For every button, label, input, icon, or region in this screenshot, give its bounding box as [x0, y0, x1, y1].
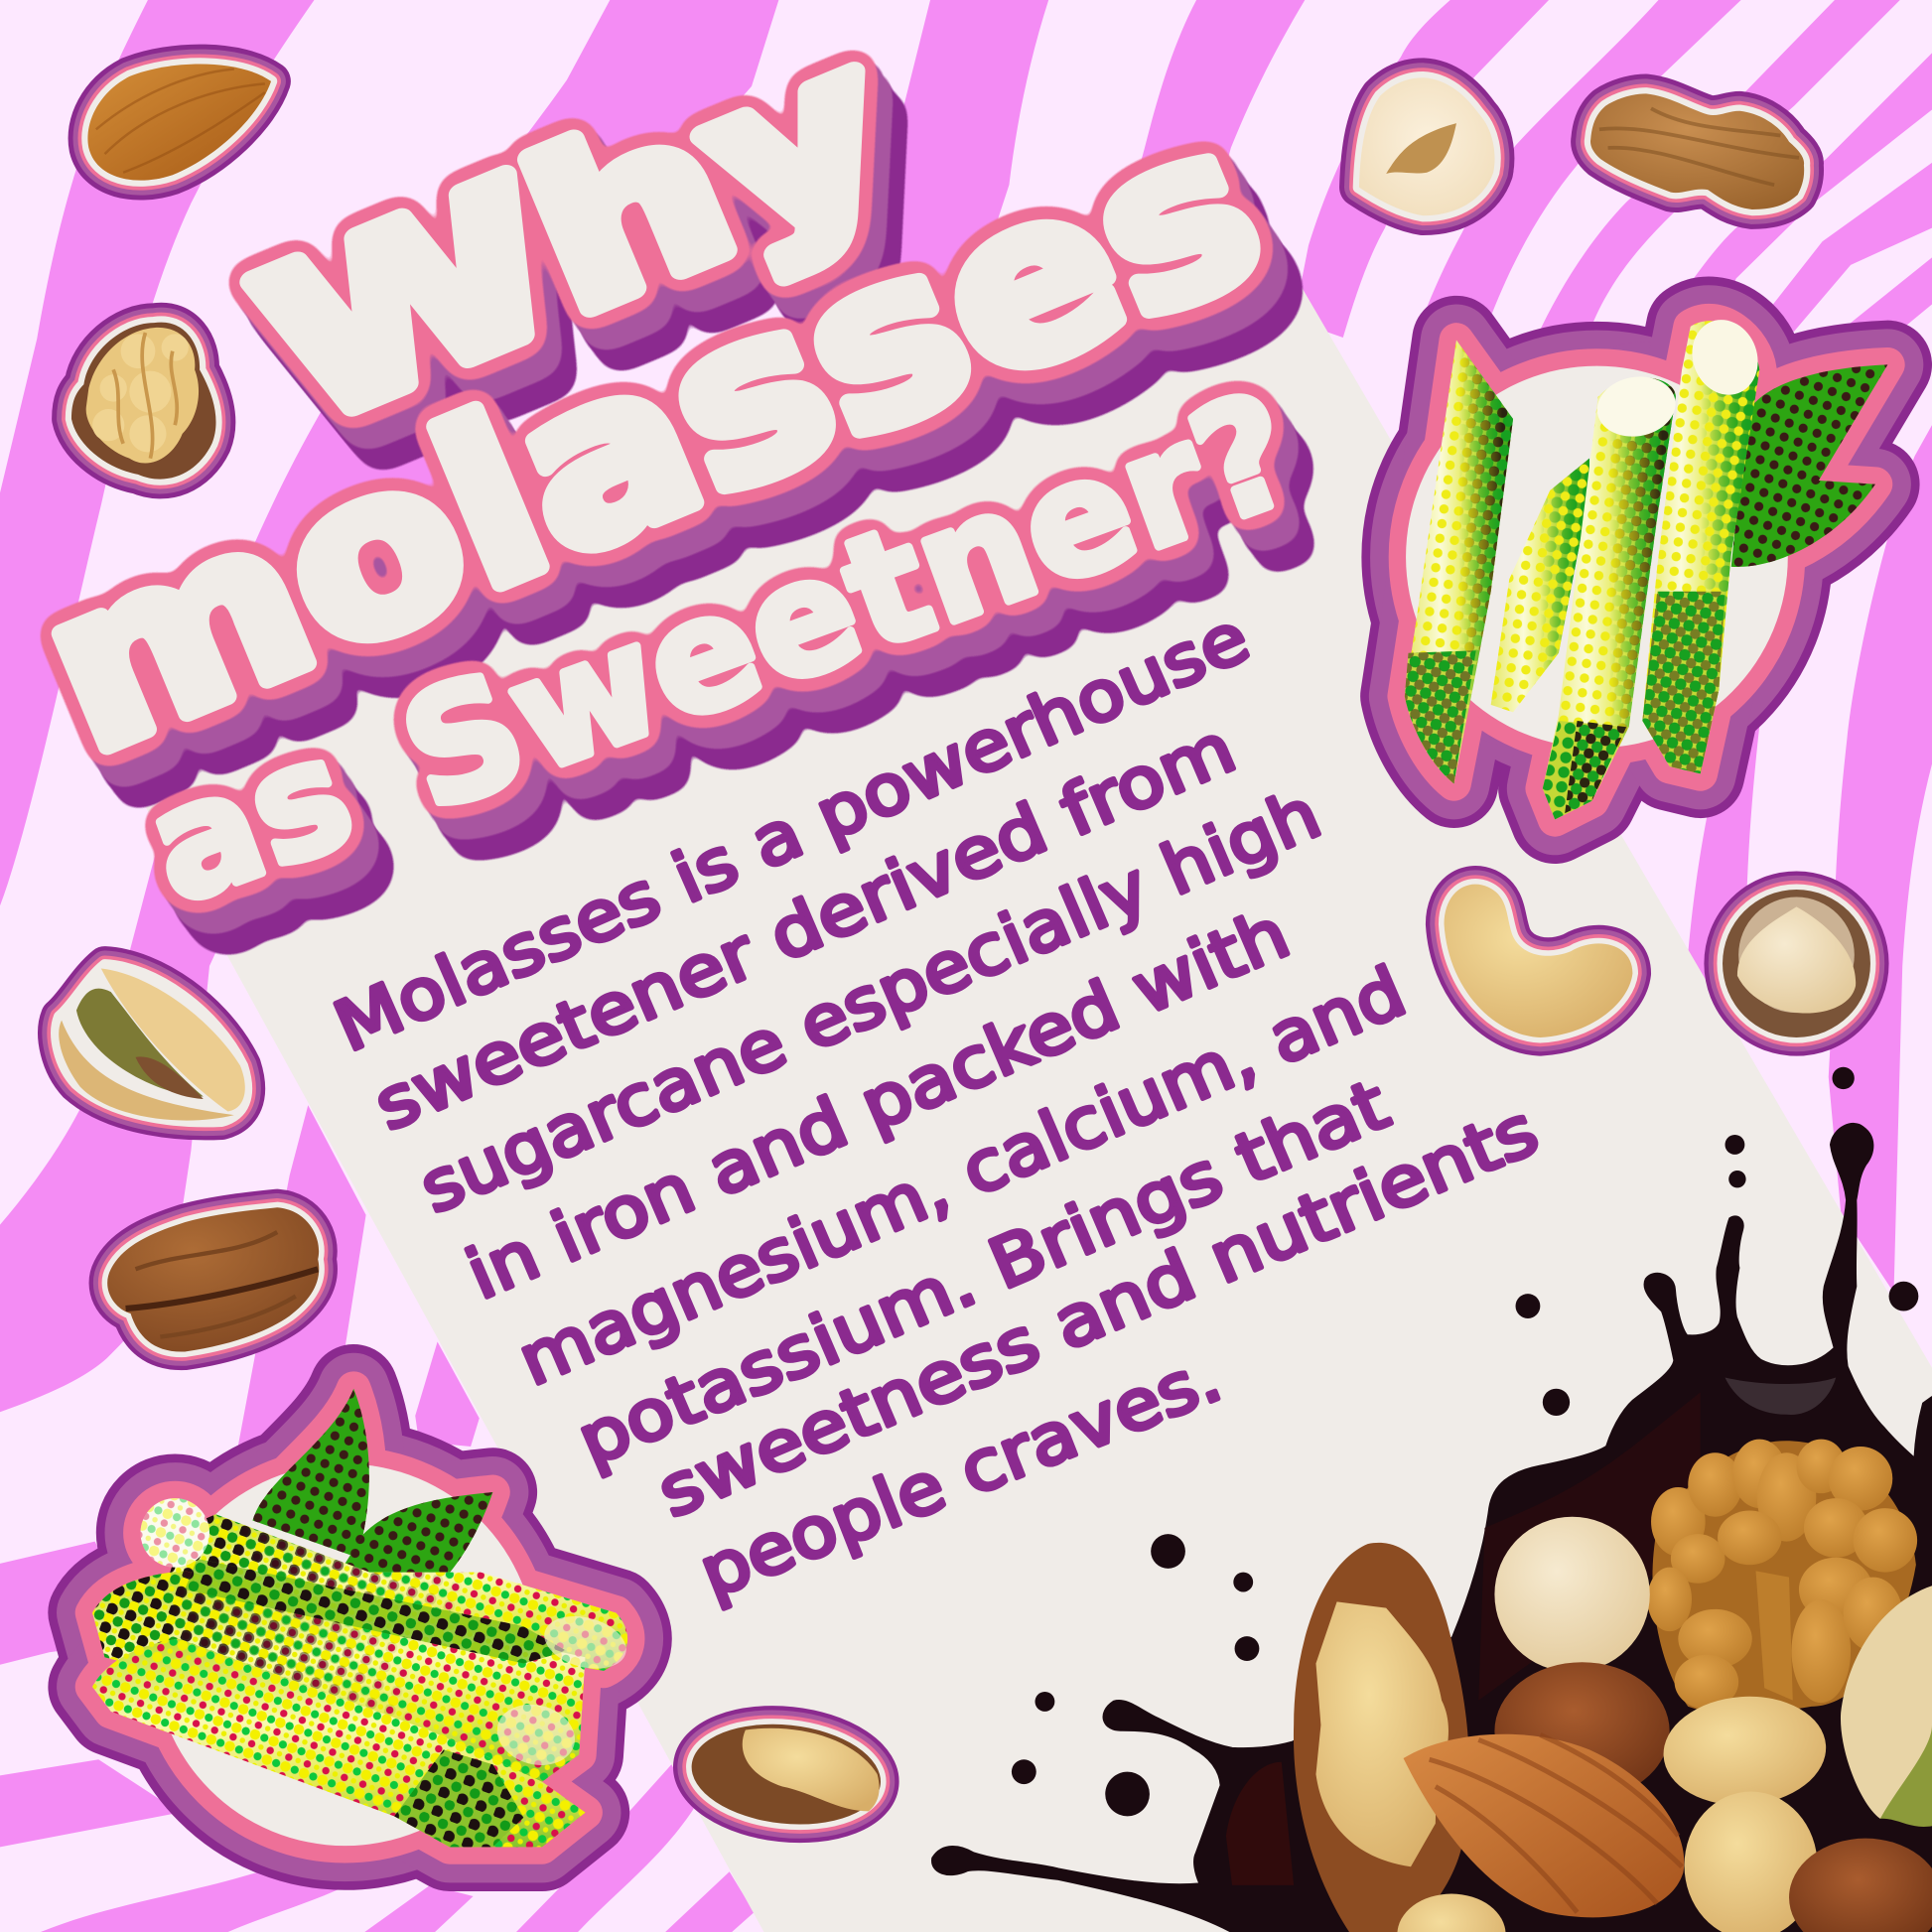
- title: Why molasses as Sweetner?: [9, 0, 1316, 939]
- body paragraph: in iron and packed with: [456, 893, 1301, 1315]
- title line: as Sweetner?: as Sweetner?: [126, 358, 1316, 939]
- macadamia: [1494, 1517, 1650, 1672]
- walnut: [1647, 1440, 1917, 1714]
- icon: macadamia in shell sticker: [1723, 890, 1870, 1037]
- leaves: [252, 1389, 492, 1600]
- cane stalks: [92, 1498, 632, 1847]
- cane stalks: [1405, 311, 1768, 819]
- title line: molasses: molasses: [9, 72, 1293, 803]
- sugarcane sticker, bottom left: [92, 1389, 632, 1847]
- body paragraph: Molasses is a powerhouse: [323, 597, 1260, 1067]
- icon: almond sticker: [87, 64, 271, 181]
- lower hazelnut: [1789, 1839, 1932, 1932]
- sugarcane sticker, top right: [1405, 311, 1887, 819]
- icon: walnut half sticker: [71, 323, 216, 480]
- small kernel: [1397, 1894, 1506, 1932]
- lower kernel: [1685, 1792, 1818, 1932]
- icon: pistachio sticker: [57, 965, 247, 1122]
- brazil nut: [1294, 1543, 1469, 1932]
- title line: Why: Why: [229, 0, 921, 473]
- almond: [1404, 1734, 1684, 1917]
- pistachio: [1841, 1586, 1932, 1827]
- body paragraph: magnesium, calcium, and: [507, 951, 1417, 1402]
- icon: cashew sticker: [1445, 885, 1632, 1037]
- icon: pecan sticker: [107, 1207, 319, 1352]
- icon: peanut sticker: [1590, 93, 1804, 209]
- icon: hazelnut half sticker: [1359, 77, 1495, 215]
- peanut kernel: [1660, 1691, 1830, 1811]
- molasses splash with droplets: [932, 1067, 1932, 1932]
- icon: brazil nut sticker: [687, 1716, 886, 1834]
- mixed nuts pile: [1294, 1440, 1932, 1932]
- leaves: [1731, 364, 1887, 567]
- body paragraph: potassium. Brings that: [567, 1064, 1400, 1482]
- body paragraph: people craves.: [689, 1336, 1232, 1613]
- body paragraph: sweetener derived from: [363, 708, 1246, 1147]
- body paragraph: [323, 597, 1549, 1613]
- hazelnut: [1494, 1662, 1670, 1800]
- body paragraph: sugarcane especially high: [409, 773, 1331, 1229]
- body paragraph: sweetness and nutrients: [646, 1090, 1549, 1534]
